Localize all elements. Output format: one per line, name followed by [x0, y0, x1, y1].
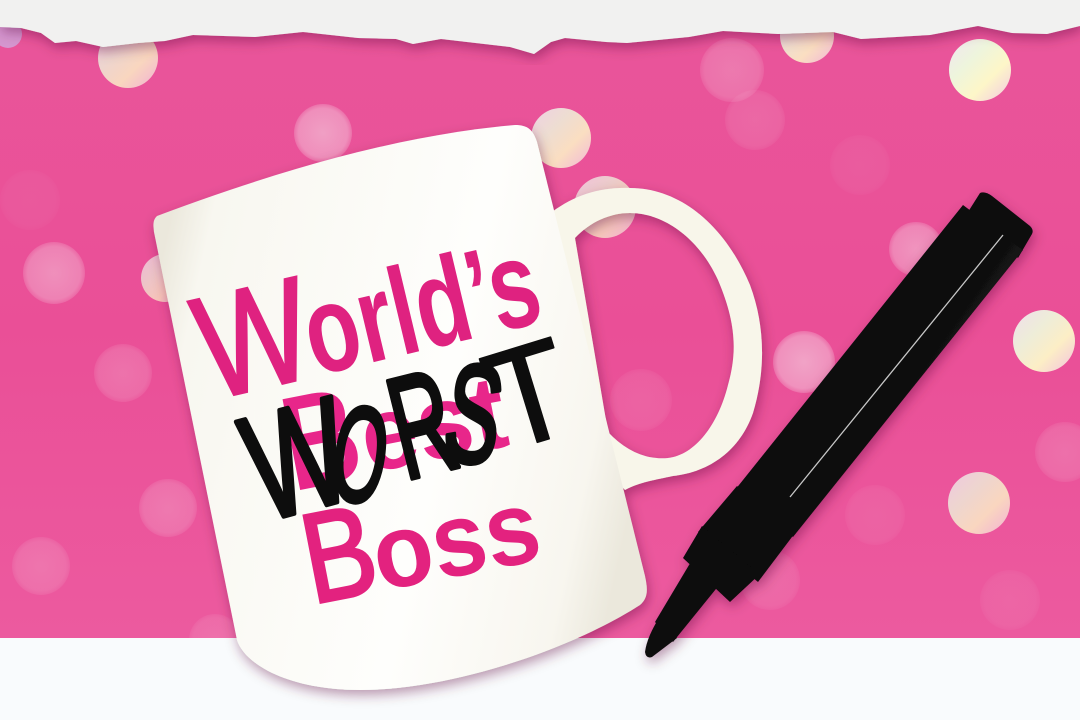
mug text: Boss: oss	[362, 468, 549, 614]
marker tip	[645, 618, 677, 657]
handwritten word: WORST: O	[323, 376, 397, 533]
mug text: Best	[269, 354, 516, 517]
handwritten word: WORST: S	[436, 332, 512, 495]
marker cap end	[968, 192, 1033, 258]
mug	[153, 125, 762, 690]
marker barrel	[735, 205, 1023, 537]
mug text: Best: est	[350, 354, 516, 496]
handwritten word: WORST: T	[468, 307, 590, 481]
torn white paper top edge	[0, 0, 1080, 54]
mug text: World's: W	[180, 246, 326, 430]
handwritten word: WORST: W	[227, 365, 367, 553]
mug text: World's: orld’s	[289, 213, 553, 402]
handwritten word: WORST	[227, 307, 590, 553]
mug text: World's	[180, 213, 553, 430]
handwritten word: WORST: R	[373, 338, 471, 510]
mug text: Boss	[290, 468, 549, 631]
marker neck	[683, 526, 760, 602]
marker nozzle	[655, 560, 720, 642]
mug handle	[540, 188, 762, 490]
mug text: Boss: B	[290, 477, 388, 631]
marker highlight line	[790, 235, 1003, 497]
white paper strip at the bottom	[0, 638, 1080, 720]
mug body	[153, 125, 647, 690]
marker collar	[698, 486, 795, 582]
marker pen	[645, 192, 1033, 657]
mug text: Best: B	[269, 360, 372, 517]
